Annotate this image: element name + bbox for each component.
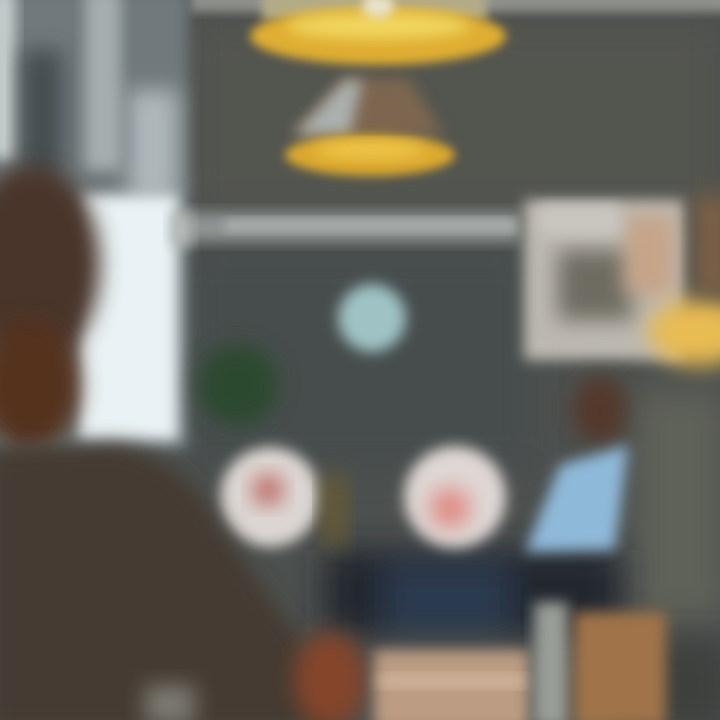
right white circle icon xyxy=(404,446,506,548)
wall sign band xyxy=(170,212,520,246)
left white circle icon xyxy=(220,447,320,547)
bottom-left pale object xyxy=(145,685,195,720)
upper pendant lamp xyxy=(250,0,506,65)
seated person xyxy=(525,376,628,552)
foreground person's body xyxy=(0,445,366,720)
tan box xyxy=(574,612,666,720)
table xyxy=(374,650,529,720)
couch and seated person's trousers xyxy=(325,550,620,635)
pale blue circle xyxy=(338,284,406,352)
yellow accent between circles xyxy=(322,475,346,545)
foreground person's head xyxy=(0,165,100,450)
plant xyxy=(198,345,278,425)
white cylinder xyxy=(534,602,568,720)
wall light glow xyxy=(648,195,720,366)
picture frame xyxy=(524,200,684,360)
lower pendant lamp xyxy=(285,78,455,176)
window xyxy=(0,0,188,450)
